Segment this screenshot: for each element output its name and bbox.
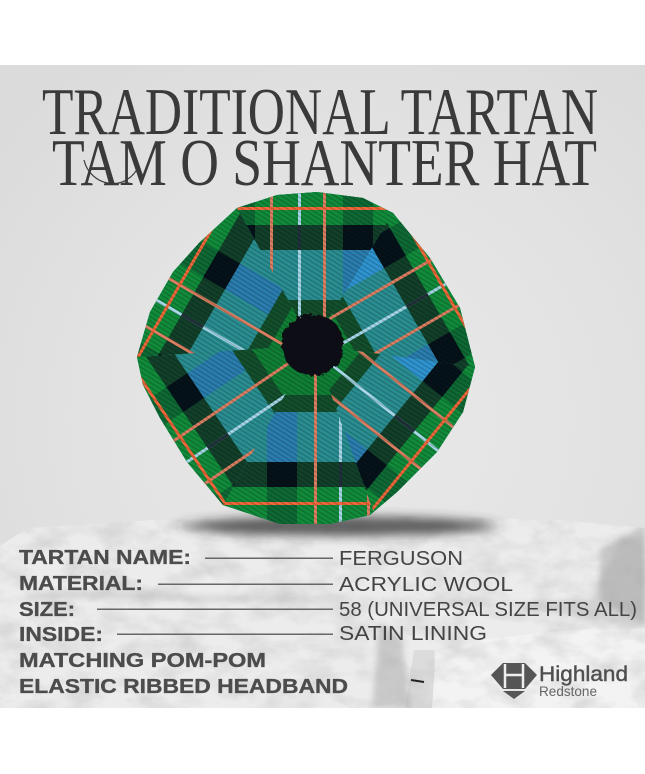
spec row: inside: [19, 623, 487, 646]
logo: Highland Redstone: Highland: [539, 663, 628, 686]
hat panel: top: [237, 192, 393, 318]
spec row: inside: INSIDE:: [19, 624, 103, 646]
hat panel: upper left: [137, 208, 297, 357]
hat panel: upper right: [329, 213, 475, 367]
spec row: tartan name: [19, 547, 463, 570]
spec row: inside: SATIN LINING: [339, 623, 487, 645]
white stone podium: [0, 510, 645, 708]
woven twill texture: [130, 185, 480, 530]
white bottom margin: [0, 708, 645, 774]
spec row: material: MATERIAL:: [19, 573, 143, 595]
title: [42, 75, 598, 200]
hat panel: bottom: [223, 372, 374, 524]
pom-pom: [282, 314, 344, 376]
spec row: material: [19, 573, 513, 596]
hat panel: lower left: [137, 348, 298, 505]
spec row: material: ACRYLIC WOOL: [339, 574, 513, 596]
feature: matching pom-pom: MATCHING POM-POM: [19, 650, 266, 672]
hat panel: lower right: [324, 349, 475, 512]
hat shadow: [185, 516, 495, 536]
spec row: tartan name: TARTAN NAME:: [19, 547, 191, 569]
tartan hat: [137, 192, 475, 524]
spec row: size: SIZE:: [19, 599, 75, 621]
spec row: size: 58 (UNIVERSAL SIZE FITS ALL): [339, 599, 637, 621]
logo: Highland Redstone: [491, 663, 628, 699]
spec row: size: [19, 599, 637, 621]
logo icon: [491, 663, 537, 699]
logo: Highland Redstone: Redstone: [539, 683, 597, 699]
feature: elastic ribbed headband: ELASTIC RIBBED HEADBAND: [19, 676, 348, 698]
spec row: tartan name: FERGUSON: [339, 548, 463, 570]
